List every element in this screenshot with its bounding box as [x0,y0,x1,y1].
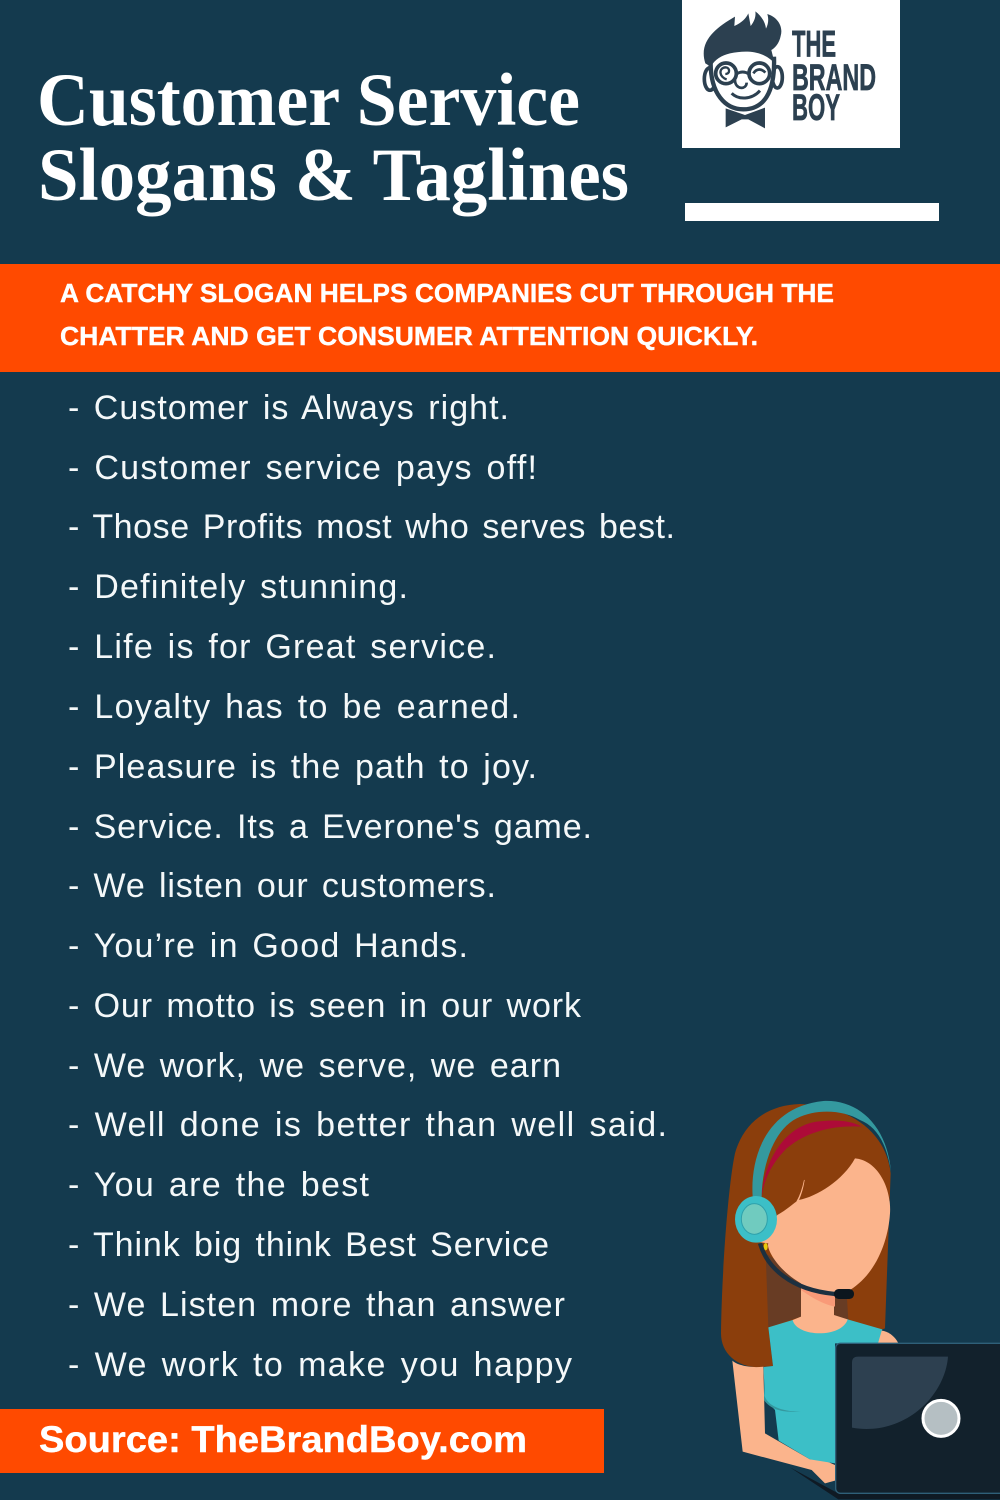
source banner: Source: TheBrandBoy.com [39,1419,527,1460]
laptop highlight [852,1357,948,1429]
laptop lid [836,1343,1000,1493]
headband [762,1120,862,1197]
logo wordmark: BRAND [792,57,876,98]
slogan list: - We work, we serve, we earn [68,1047,561,1085]
slogan list: - We listen our customers. [68,867,496,905]
hair [721,1104,891,1367]
title: Customer Service [37,59,580,142]
slogan list: - Service. Its a Everone's game. [68,808,592,846]
slogan list: - Life is for Great service. [68,628,496,666]
icon: boy mascot [704,11,782,128]
title [37,59,629,217]
microphone [834,1289,854,1299]
shirt [764,1319,882,1463]
slogan list: - Pleasure is the path to joy. [68,748,537,786]
arm [732,1361,835,1483]
slogan list: - Think big think Best Service [68,1226,549,1264]
slogan list: - You are the best [68,1166,370,1204]
neck shadow [801,1281,835,1307]
banner: intro statement: CHATTER AND GET CONSUMER ATTENTION QUICKLY. [60,321,758,351]
slogan list: - Loyalty has to be earned. [68,688,520,726]
logo wordmark: BOY [792,87,840,128]
earcup [735,1196,777,1243]
slogan list [68,389,675,1384]
slogan list: - We Listen more than answer [68,1286,565,1324]
laptop base [790,1467,1000,1499]
laptop logo circle [923,1400,959,1436]
slogan list: - Customer service pays off! [68,449,537,487]
logo: The Brand Boy [682,0,900,148]
logo wordmark: THE [792,24,836,64]
hair shadow [766,1253,848,1327]
slogan list: - We work to make you happy [68,1346,572,1384]
white accent bar [685,203,939,221]
illustration: call centre agent with laptop [721,1101,1000,1499]
logo wordmark [792,24,876,128]
headset boom [760,1243,835,1294]
slogan list: - Those Profits most who serves best. [68,508,675,546]
slogan list: - Our motto is seen in our work [68,987,582,1025]
slogan list: - You’re in Good Hands. [68,927,468,965]
earring [764,1243,768,1250]
shoulder [878,1331,898,1343]
banner: intro statement [0,264,1000,372]
title: Slogans & Taglines [38,134,629,217]
source banner [0,1409,604,1473]
slogan list: - Definitely stunning. [68,568,408,606]
shirt fold [764,1394,801,1412]
banner: intro statement: A CATCHY SLOGAN HELPS COMPANIES CUT THROUGH THE [60,278,834,308]
neck [793,1278,848,1333]
fringe strand [797,1180,804,1202]
slogan list: - Well done is better than well said. [68,1106,667,1144]
earcup inner [741,1204,767,1234]
headset band [752,1101,891,1198]
slogan list: - Customer is Always right. [68,389,509,427]
face [755,1158,890,1293]
